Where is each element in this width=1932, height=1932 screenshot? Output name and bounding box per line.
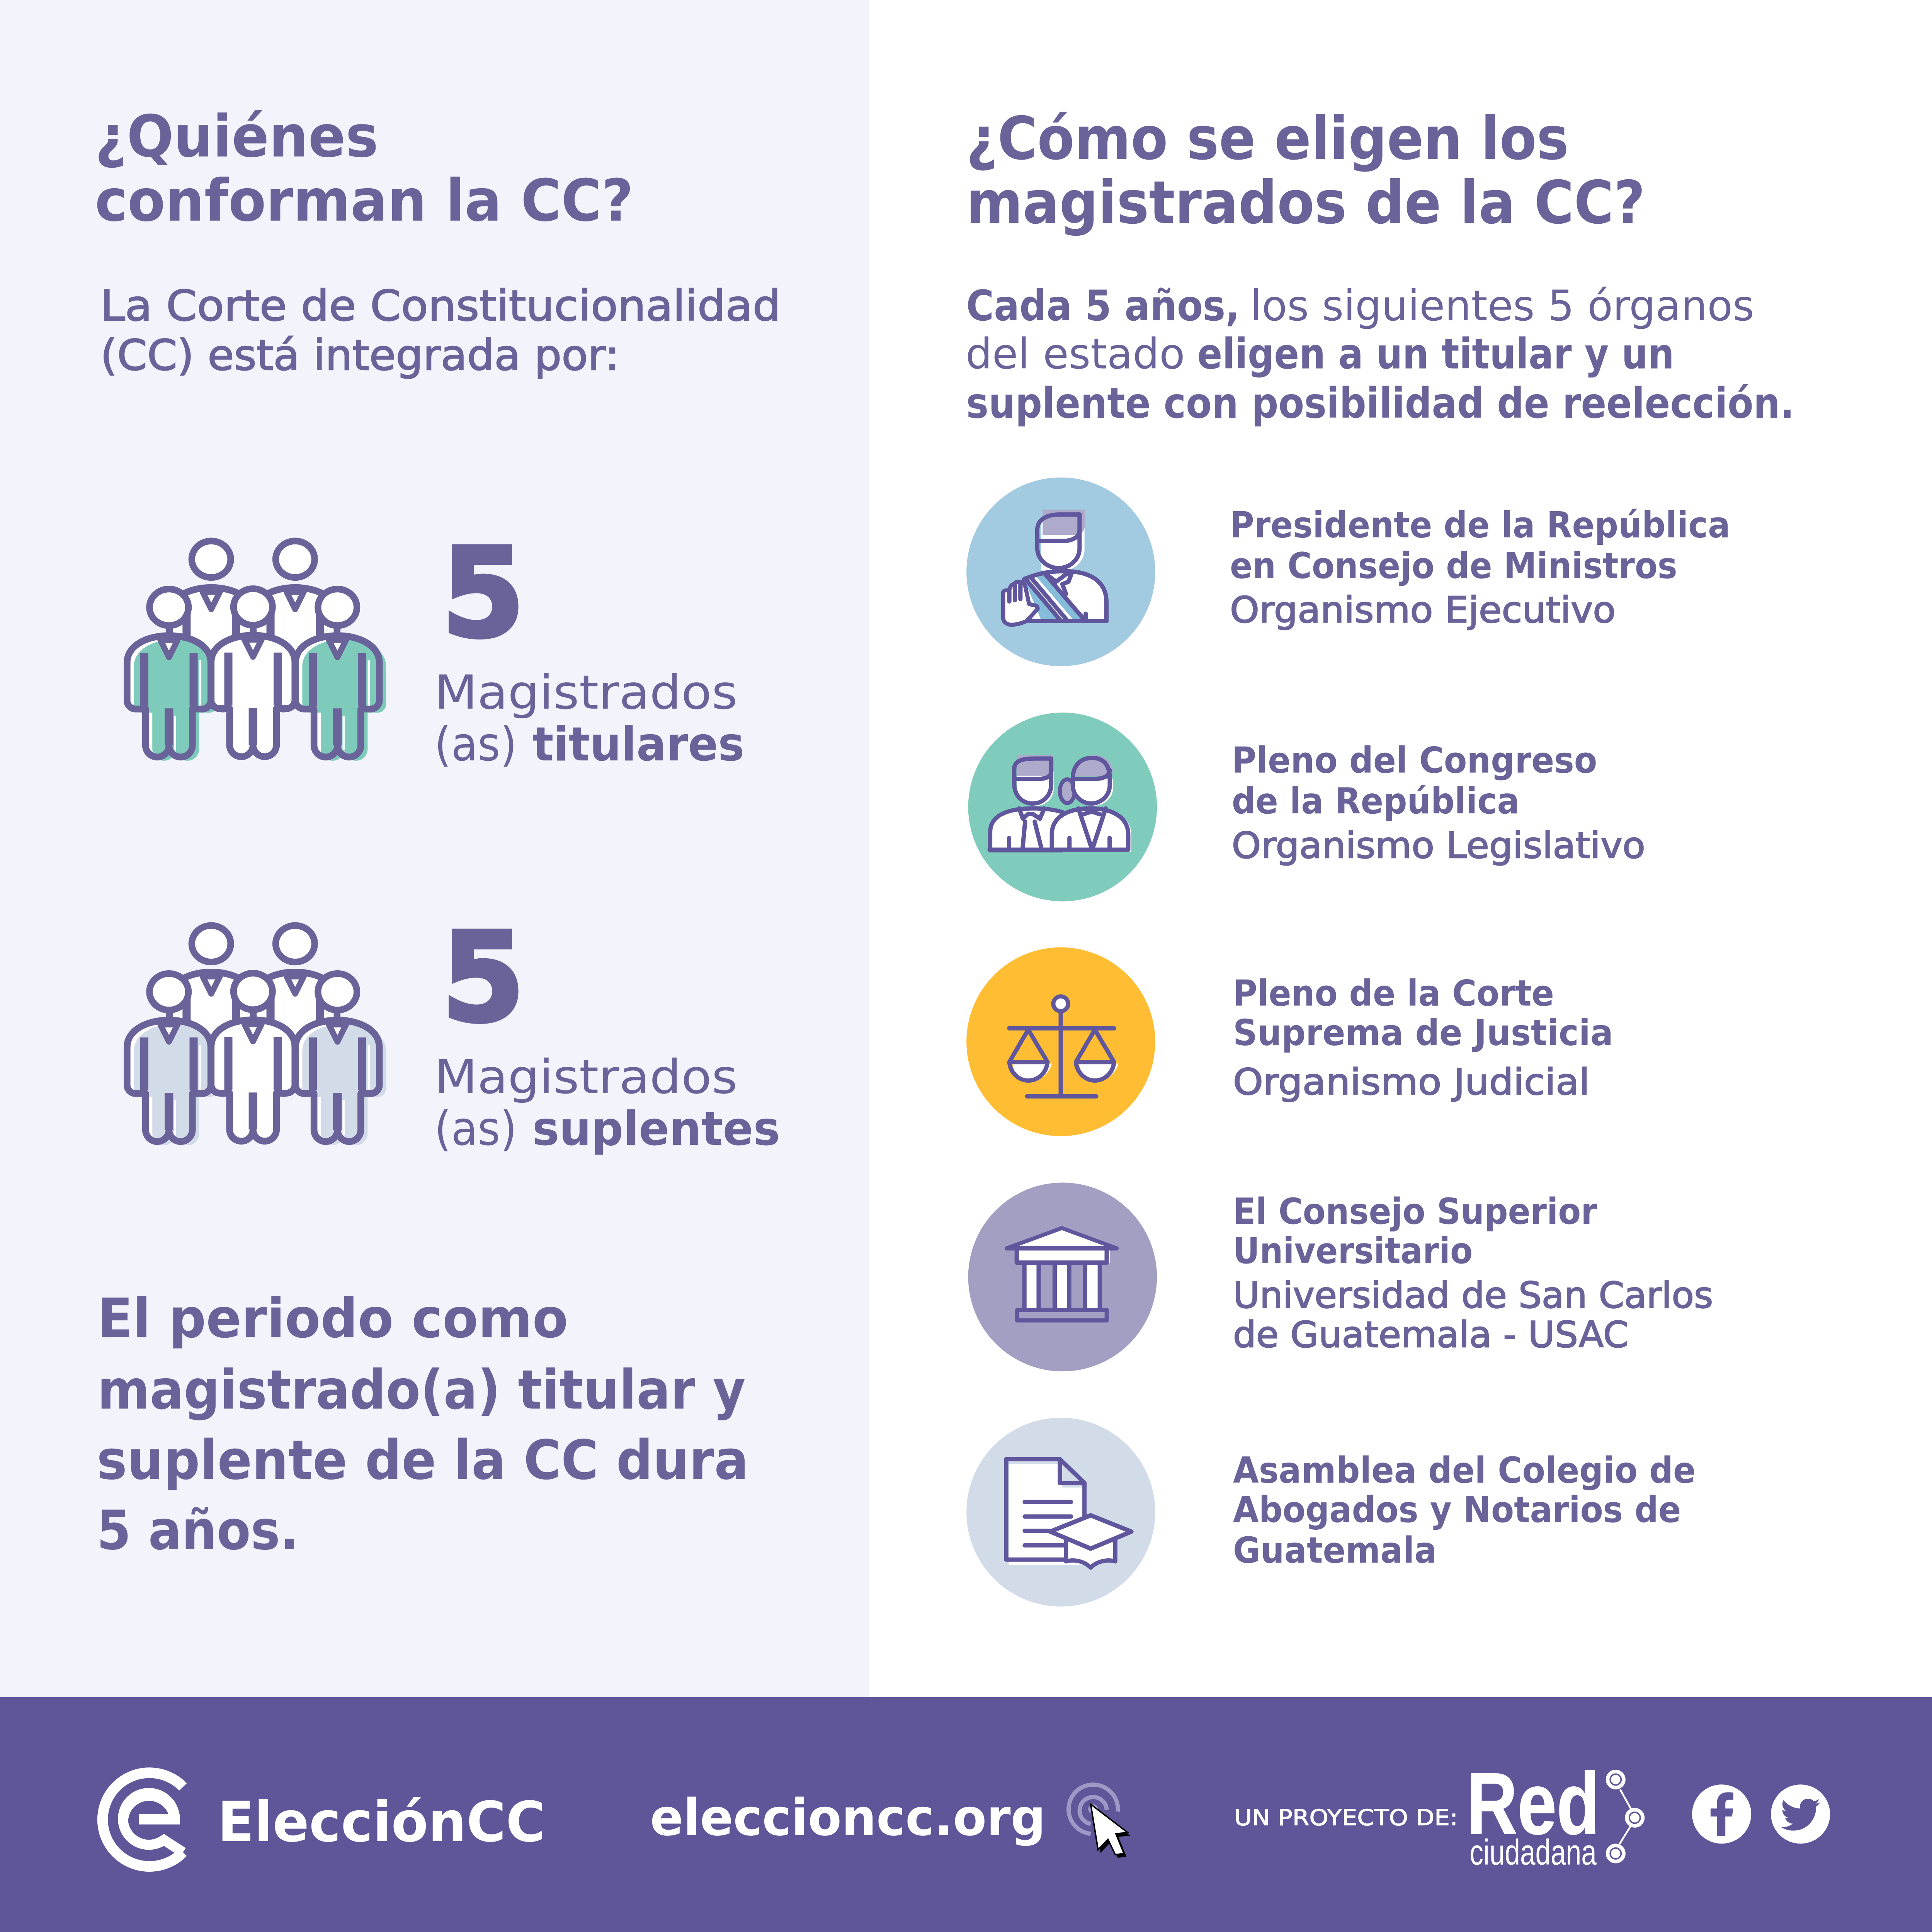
text: intro elección: del estado: [966, 330, 1185, 379]
text: consejo universitario: Universitario: [1233, 1230, 1473, 1272]
stat: 5 suplentes: 5: [441, 906, 525, 1050]
icon: diputados: [968, 713, 1157, 901]
panel: cómo se eligen: [966, 104, 1794, 1607]
text: duración del periodo: 5 años.: [97, 1499, 299, 1562]
text: integración de la corte: [100, 281, 781, 380]
icon: grupo de magistrados titulares: [127, 541, 386, 761]
text: colegio de abogados: Abogados y Notarios de: [1233, 1489, 1681, 1531]
logo: ElecciónCC: [103, 1773, 545, 1866]
text: colegio de abogados: [1233, 1449, 1696, 1571]
heading: quiénes: ¿Quiénes: [95, 103, 378, 170]
text: consejo universitario: de Guatemala - USAC: [1233, 1314, 1629, 1355]
text: corte suprema: [1233, 973, 1613, 1103]
text: intro elección: suplente con posibilidad de reelección.: [966, 379, 1794, 428]
text: congreso: Pleno del Congreso: [1232, 740, 1597, 781]
link: sitio web: eleccioncc.org: [650, 1788, 1046, 1847]
stat: 5 suplentes: suplentes: [532, 1102, 780, 1156]
text: integración de la corte: La Corte de Constitucionalidad: [100, 281, 781, 330]
logo: ElecciónCC: ElecciónCC: [218, 1790, 545, 1854]
icon: presidente con banda: [966, 478, 1155, 666]
text: duración del periodo: suplente de la CC dura: [97, 1429, 749, 1492]
stat: 5 titulares: [434, 522, 744, 772]
stat: 5 suplentes: Magistrados: [434, 1050, 738, 1104]
text: colegio de abogados: Guatemala: [1233, 1529, 1437, 1571]
item: corte suprema: [966, 947, 1613, 1136]
text: duración del periodo: El periodo como: [97, 1287, 568, 1350]
icon: edificio con columnas: [968, 1183, 1157, 1371]
stat: 5 titulares: titulares: [532, 717, 744, 772]
stat: 5 suplentes: (as): [434, 1102, 517, 1156]
logo: Red ciudadana: Red: [1466, 1755, 1600, 1852]
text: congreso: Organismo Legislativo: [1232, 825, 1645, 866]
icon: cursor y ondas: [1069, 1785, 1130, 1858]
text: integración de la corte: (CC) está integrada por:: [100, 331, 619, 380]
text: corte suprema: Pleno de la Corte: [1233, 973, 1554, 1014]
text: un proyecto de: UN PROYECTO DE:: [1234, 1804, 1458, 1830]
item: consejo universitario: [968, 1183, 1713, 1371]
text: congreso: [1232, 740, 1645, 866]
heading: cómo se eligen: [966, 104, 1645, 237]
text: consejo universitario: El Consejo Superior: [1233, 1190, 1597, 1232]
heading: cómo se eligen: ¿Cómo se eligen los: [966, 104, 1569, 173]
text: intro elección: Cada 5 años,: [966, 281, 1240, 330]
stat: 5 titulares: Magistrados: [434, 665, 738, 720]
panel: quiénes conforman la CC: [0, 0, 869, 1697]
logo: Red ciudadana: ciudadana: [1469, 1832, 1597, 1872]
heading: quiénes: [95, 103, 633, 235]
text: presidente: Organismo Ejecutivo: [1230, 589, 1616, 631]
stat: 5 titulares: (as): [434, 717, 517, 772]
item: presidente: [966, 478, 1730, 666]
text: presidente: en Consejo de Ministros: [1230, 545, 1677, 587]
text: intro elección: eligen a un titular y un: [1197, 330, 1674, 379]
icon: documento y birrete: [966, 1418, 1155, 1607]
text: presidente: [1230, 504, 1730, 631]
text: colegio de abogados: Asamblea del Colegio de: [1233, 1449, 1696, 1491]
icon: grupo de magistrados suplentes: [127, 925, 386, 1145]
text: intro elección: [966, 281, 1794, 428]
text: consejo universitario: [1233, 1190, 1713, 1355]
item: colegio de abogados: [966, 1418, 1696, 1607]
stat: 5 titulares: 5: [441, 522, 525, 665]
icon: logo e: [103, 1773, 183, 1866]
text: presidente: Presidente de la República: [1230, 504, 1730, 546]
text: corte suprema: Suprema de Justicia: [1233, 1012, 1613, 1054]
heading: cómo se eligen: magistrados de la CC?: [966, 168, 1645, 237]
text: corte suprema: Organismo Judicial: [1233, 1061, 1590, 1103]
text: duración del periodo: [97, 1287, 749, 1562]
icon: facebook: [1692, 1784, 1751, 1844]
text: congreso: de la República: [1232, 780, 1520, 822]
text: duración del periodo: magistrado(a) titular y: [97, 1359, 746, 1422]
footer: [0, 1697, 1932, 1932]
heading: quiénes: conforman la CC?: [95, 167, 633, 235]
stat: 5 suplentes: [434, 906, 780, 1156]
item: congreso: [968, 713, 1645, 901]
icon: twitter: [1771, 1784, 1830, 1844]
text: intro elección: los siguientes 5 órganos: [1250, 281, 1754, 330]
icon: balanza: [966, 947, 1155, 1136]
text: consejo universitario: Universidad de San Carlos: [1233, 1274, 1713, 1316]
